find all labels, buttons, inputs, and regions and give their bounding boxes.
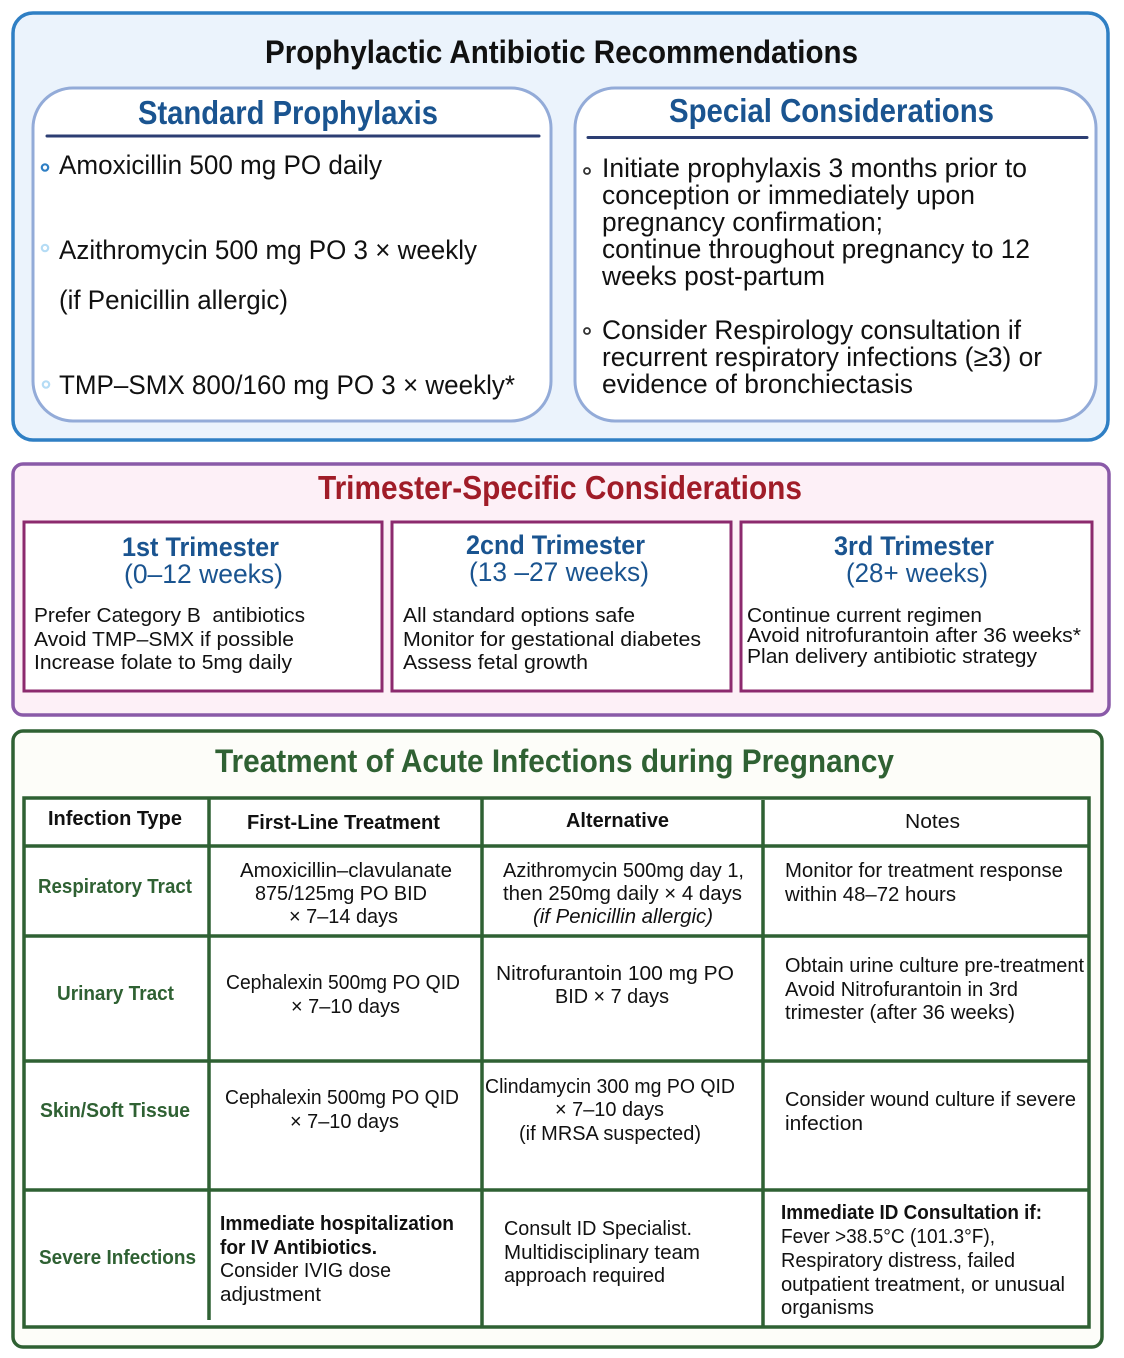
bullet: initiate prophylaxis xyxy=(584,168,590,174)
bullet: azithromycin xyxy=(42,245,48,251)
row: respiratory tract: 875/125mg PO BID xyxy=(255,883,427,905)
row: urinary tract: trimester (after 36 weeks) xyxy=(785,1002,1015,1024)
row: severe infections: Multidisciplinary team xyxy=(504,1242,700,1264)
row: severe infections: Immediate hospitalization xyxy=(220,1213,454,1235)
card: 1st trimester: (0–12 weeks) xyxy=(124,559,283,589)
heading: trimester-specific considerations: Trimester-Specific Considerations xyxy=(318,469,802,506)
heading: special considerations: Special Considerations xyxy=(669,92,994,129)
text: initiate prophylaxis: pregnancy confirmation; xyxy=(602,207,883,237)
text: respirology consultation xyxy=(602,315,1042,399)
row: urinary tract: Avoid Nitrofurantoin in 3rd xyxy=(785,979,1018,1001)
text: azithromycin: Azithromycin 500 mg PO 3 × weekly xyxy=(59,235,478,265)
panel: special considerations xyxy=(575,88,1096,421)
row: severe infections: Respiratory distress, failed xyxy=(781,1250,1015,1272)
row: severe infections: Fever >38.5°C (101.3°F), xyxy=(781,1226,995,1248)
row: skin and soft tissue: Consider wound culture if severe xyxy=(785,1089,1076,1111)
row: respiratory tract: Monitor for treatment response xyxy=(785,860,1063,882)
panel: treatment of acute infections xyxy=(13,731,1102,1347)
row: urinary tract: Urinary Tract xyxy=(57,983,174,1005)
text: initiate prophylaxis: continue throughout pregnancy to 12 xyxy=(602,234,1030,264)
row: urinary tract: Obtain urine culture pre-treatment xyxy=(785,955,1084,977)
row: severe infections: organisms xyxy=(781,1297,874,1319)
row: respiratory tract: Amoxicillin–clavulanate xyxy=(240,860,452,882)
card: 3rd trimester: Avoid nitrofurantoin after 36 weeks* xyxy=(747,624,1081,647)
row: severe infections: approach required xyxy=(504,1265,665,1287)
text: respirology consultation: Consider Respirology consultation if xyxy=(602,315,1022,345)
row: urinary tract: Cephalexin 500mg PO QID xyxy=(226,972,460,994)
row: skin and soft tissue: Skin/Soft Tissue xyxy=(40,1100,190,1122)
row: skin and soft tissue: (if MRSA suspected) xyxy=(519,1123,701,1145)
card: 2nd trimester: Assess fetal growth xyxy=(403,651,588,674)
bullet: respirology xyxy=(584,328,590,334)
card: 2nd trimester: All standard options safe xyxy=(403,604,635,627)
row: severe infections: Consult ID Specialist. xyxy=(504,1218,692,1240)
row: skin and soft tissue: infection xyxy=(785,1113,863,1135)
text: initiate prophylaxis xyxy=(601,153,1030,291)
card: 3rd trimester: 3rd Trimester xyxy=(834,531,994,561)
text: amoxicillin: Amoxicillin 500 mg PO daily xyxy=(59,150,383,180)
row: severe infections: outpatient treatment, or unusual xyxy=(781,1274,1065,1296)
heading: treatment of acute infections: Treatment of Acute Infections during Pregnancy xyxy=(215,743,894,779)
card: 1st trimester: Avoid TMP–SMX if possible xyxy=(34,628,294,651)
row: severe infections: Immediate ID Consultation if: xyxy=(781,1202,1042,1224)
row: respiratory tract: Azithromycin 500mg day 1, xyxy=(503,860,744,882)
table grid xyxy=(24,798,1089,1327)
row: severe infections: Consider IVIG dose xyxy=(220,1260,391,1282)
panel: prophylactic antibiotic recommendations xyxy=(13,13,1108,440)
row: severe infections: for IV Antibiotics. xyxy=(220,1237,377,1259)
bullet: amoxicillin xyxy=(42,164,48,171)
text: initiate prophylaxis: weeks post-partum xyxy=(601,261,825,291)
card: 2nd trimester xyxy=(392,522,731,691)
card: 2nd trimester: 2cnd Trimester xyxy=(466,530,645,560)
row: respiratory tract: × 7–14 days xyxy=(289,906,398,928)
row: respiratory tract: within 48–72 hours xyxy=(784,884,956,906)
card: 2nd trimester: (13 –27 weeks) xyxy=(469,557,649,587)
row: urinary tract: Nitrofurantoin 100 mg PO xyxy=(496,963,734,985)
card: 2nd trimester: Monitor for gestational diabetes xyxy=(403,628,701,651)
row: respiratory tract: then 250mg daily × 4 days xyxy=(503,883,742,905)
card: 3rd trimester xyxy=(741,522,1092,691)
table header row: Infection Type xyxy=(48,808,182,830)
text: respirology consultation: recurrent respiratory infections (≥3) or xyxy=(602,342,1042,372)
heading: standard prophylaxis: Standard Prophylaxis xyxy=(138,94,438,131)
panel: trimester-specific considerations xyxy=(13,464,1109,715)
row: severe infections xyxy=(39,1202,1065,1319)
heading: prophylactic antibiotic recommendations: Prophylactic Antibiotic Recommendations xyxy=(265,34,858,70)
text: initiate prophylaxis: conception or immediately upon xyxy=(602,180,975,210)
row: urinary tract: × 7–10 days xyxy=(291,996,400,1018)
row: severe infections: adjustment xyxy=(220,1284,321,1306)
row: respiratory tract: Respiratory Tract xyxy=(38,876,192,898)
table header row: First-Line Treatment xyxy=(247,812,440,834)
row: skin and soft tissue xyxy=(40,1076,1076,1145)
card: 1st trimester: Prefer Category B antibiotics xyxy=(34,604,305,627)
card: 1st trimester: Increase folate to 5mg daily xyxy=(34,651,293,674)
table header row: Notes xyxy=(905,811,960,833)
table header row xyxy=(48,808,960,834)
row: severe infections: Severe Infections xyxy=(39,1247,196,1269)
card: 1st trimester: 1st Trimester xyxy=(122,532,279,562)
row: respiratory tract xyxy=(38,860,1063,928)
bullet: tmp-smx xyxy=(43,381,49,388)
card: 3rd trimester: Continue current regimen xyxy=(747,604,982,627)
card: 3rd trimester: Plan delivery antibiotic strategy xyxy=(747,645,1038,668)
row: skin and soft tissue: × 7–10 days xyxy=(555,1099,664,1121)
row: urinary tract xyxy=(57,955,1084,1024)
panel: standard prophylaxis xyxy=(33,88,551,421)
row: skin and soft tissue: Cephalexin 500mg PO QID xyxy=(225,1087,459,1109)
row: skin and soft tissue: × 7–10 days xyxy=(290,1111,399,1133)
text: initiate prophylaxis: Initiate prophylaxis 3 months prior to xyxy=(602,153,1027,183)
row: urinary tract: BID × 7 days xyxy=(555,986,669,1008)
text: penicillin allergy note: (if Penicillin allergic) xyxy=(59,285,288,315)
table header row: Alternative xyxy=(566,810,669,832)
text: tmp-smx: TMP–SMX 800/160 mg PO 3 × weekly* xyxy=(59,370,515,400)
row: respiratory tract: (if Penicillin allergic) xyxy=(533,906,713,928)
card: 3rd trimester: (28+ weeks) xyxy=(846,558,988,588)
card: 1st trimester xyxy=(24,522,382,691)
row: skin and soft tissue: Clindamycin 300 mg PO QID xyxy=(485,1076,735,1098)
text: respirology consultation: evidence of bronchiectasis xyxy=(602,369,913,399)
